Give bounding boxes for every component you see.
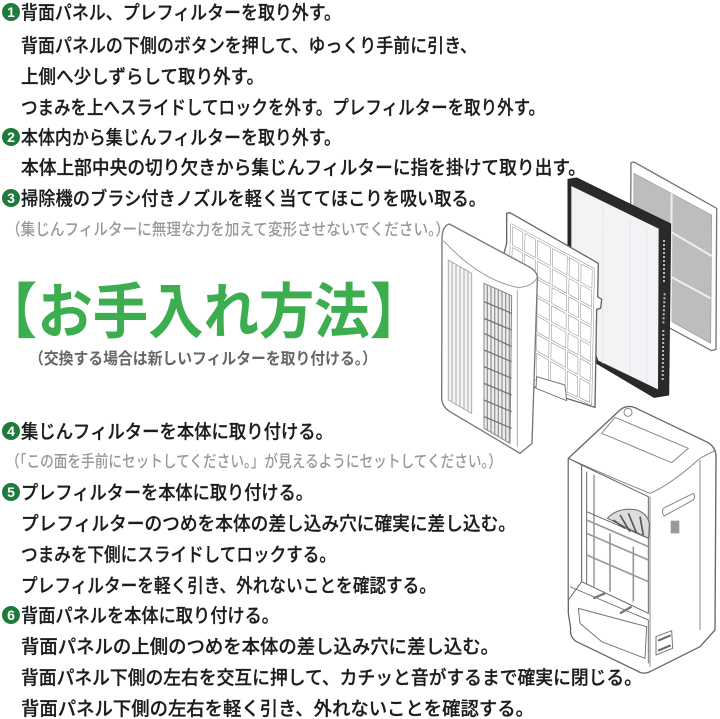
step 4 number: 4 — [7, 423, 15, 439]
step 6 heading: 背面パネルを本体に取り付ける。 — [21, 605, 279, 627]
front back-panel — [442, 224, 538, 453]
step 5 details: つまみを下側にスライドしてロックする。 — [21, 544, 336, 566]
step 1 details: 背面パネルの下側のボタンを押して、ゆっくり手前に引き、 — [21, 35, 477, 57]
step 5 number: 5 — [7, 484, 15, 500]
step 1 number — [2, 3, 20, 21]
step 4 note: （「この面を手前にセットしてください。」が見えるようにセットしてください。） — [6, 451, 502, 471]
step 3 note: （集じんフィルターに無理な力を加えて変形させないでください。） — [6, 220, 450, 239]
step 2 heading: 本体内から集じんフィルターを取り外す。 — [21, 127, 341, 149]
step 6 details: 背面パネル下側の左右を交互に押して、カチッと音がするまで確実に閉じる。 — [21, 667, 642, 689]
step 1 number: 1 — [7, 4, 15, 20]
step 2 number — [2, 128, 20, 146]
step 5 details — [21, 513, 516, 597]
step 6 details: 背面パネルの上側のつめを本体の差し込み穴に差し込む。 — [21, 636, 499, 658]
step 6 number — [2, 606, 20, 624]
step 4 heading: 集じんフィルターを本体に取り付ける。 — [21, 421, 333, 443]
back mesh filter — [630, 162, 717, 351]
step 1 details: つまみを上へスライドしてロックを外す。プレフィルターを取り外す。 — [21, 97, 545, 119]
pre-filter grid — [504, 213, 602, 407]
step 3 number: 3 — [7, 190, 15, 206]
step 5 heading: プレフィルターを本体に取り付ける。 — [21, 482, 313, 504]
step 4 number — [2, 422, 20, 440]
step 2 details: 本体上部中央の切り欠きから集じんフィルターに指を掛けて取り出す。 — [21, 156, 586, 179]
step 5 number — [2, 483, 20, 501]
illustration: exploded filter parts — [442, 162, 717, 453]
step 1 details: 上側へ少しずらして取り外す。 — [21, 66, 264, 88]
step 3 heading: 掃除機のブラシ付きノズルを軽く当ててほこりを吸い取る。 — [21, 187, 486, 210]
illustration: purifier unit — [568, 406, 716, 673]
step 5 details: プレフィルターのつめを本体の差し込み穴に確実に差し込む。 — [21, 513, 516, 535]
step 3 number — [2, 189, 20, 207]
side vent — [671, 521, 679, 533]
unit body — [568, 406, 716, 673]
step 2 number: 2 — [7, 129, 15, 145]
step 6 details — [21, 636, 642, 719]
bottom tray — [570, 587, 673, 663]
step 1 heading: 背面パネル、プレフィルターを取り外す。 — [21, 2, 341, 24]
step 1 details — [21, 35, 545, 119]
step 5 details: プレフィルターを軽く引き、外れないことを確認する。 — [21, 575, 436, 597]
interior opening — [568, 458, 649, 613]
subtitle: （交換する場合は新しいフィルターを取り付ける。） — [29, 350, 377, 368]
HEPA filter — [568, 178, 671, 397]
step 6 number: 6 — [7, 607, 15, 623]
top panel details — [568, 408, 716, 667]
